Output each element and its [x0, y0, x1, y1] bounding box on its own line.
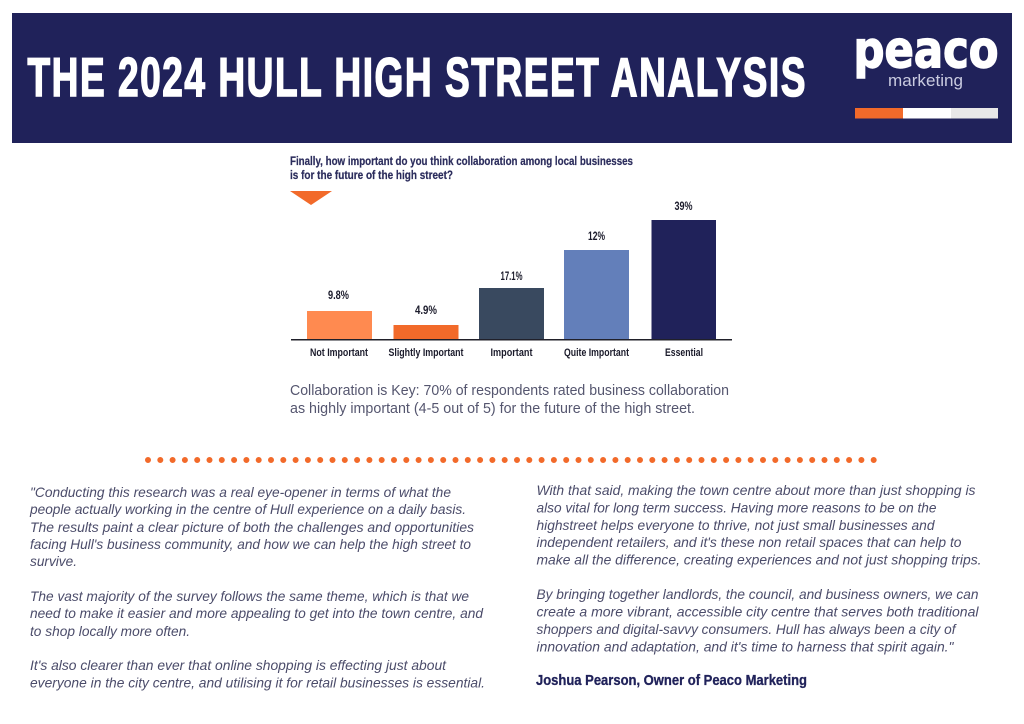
bar chart	[291, 201, 732, 359]
dotted divider	[148, 457, 875, 463]
bar: Not Important: Not Important	[310, 347, 368, 359]
bar: Important	[479, 271, 544, 359]
quote: left column: people actually working in the centre of Hull experience on a daily basis.	[29, 501, 466, 517]
chart question heading	[290, 156, 633, 182]
bar: Essential: Essential	[665, 347, 703, 359]
quote: left column	[29, 484, 485, 690]
bar: Quite Important: Quite Important	[564, 347, 629, 359]
bar: Essential	[652, 201, 716, 359]
quote: left column: to shop locally more often.	[30, 623, 190, 639]
quote: right column: make all the difference, creating experiences and not just shopping trips.	[536, 552, 982, 568]
quote: left column: everyone in the city centre, and utilising it for retail businesses is essential.	[30, 674, 485, 690]
chart question heading: is for the future of the high street?	[290, 170, 453, 182]
quote: right column: With that said, making the town centre about more than just shopping is	[536, 482, 976, 498]
quote: left column: "Conducting this research was a real eye-opener in terms of what the	[30, 484, 451, 500]
quote: right column: innovation and adaptation, and it's time to harness that spirit again."	[536, 638, 955, 654]
chart takeaway text: as highly important (4-5 out of 5) for the future of the high street.	[290, 401, 695, 417]
chart question heading: Finally, how important do you think collaboration among local businesses	[290, 156, 633, 168]
logo: peaco marketing	[854, 22, 998, 118]
quote: right column: also vital for long term success. Having more reasons to be on the	[536, 500, 937, 516]
quote: right column: shoppers and digital-savvy consumers. Hull has always been a city of	[536, 621, 958, 637]
chart takeaway text	[290, 383, 729, 417]
quote: left column: need to make it easier and more appealing to get into the town centre, and	[30, 605, 484, 621]
bar: Slightly Important: 4.9%	[415, 305, 437, 317]
bar: Not Important	[307, 290, 372, 359]
quote: left column: survive.	[30, 553, 77, 569]
bar: Important: Important	[490, 347, 533, 359]
quote: right column: By bringing together landlords, the council, and business owners, we can	[536, 586, 979, 602]
quote attribution: Joshua Pearson, Owner of Peaco Marketing	[536, 672, 807, 689]
logo: peaco marketing: peaco	[854, 22, 998, 80]
quote: left column: It's also clearer than ever that online shopping is effecting just about	[30, 657, 447, 673]
chart takeaway text: Collaboration is Key: 70% of respondents rated business collaboration	[290, 383, 729, 399]
quote: left column: The vast majority of the survey follows the same theme, which is that we	[30, 588, 469, 604]
quote: right column: independent retailers, and it's these non retail spaces that can help to	[536, 534, 962, 550]
bar: Slightly Important: Slightly Important	[388, 347, 464, 359]
logo: peaco marketing: marketing	[888, 71, 963, 90]
bar: Important: 17.1%	[500, 271, 522, 283]
quote: right column: highstreet helps everyone to thrive, not just small businesses and	[536, 517, 936, 533]
quote: left column: The results paint a clear picture of both the challenges and opportunities	[30, 519, 474, 535]
bar: Essential: 39%	[674, 201, 692, 213]
quote: left column: facing Hull's business community, and how we can help the high street to	[30, 536, 471, 552]
bar: Quite Important: 12%	[588, 231, 605, 243]
bar: Slightly Important	[388, 305, 464, 359]
bar: Quite Important	[564, 231, 629, 359]
title: THE 2024 HULL HIGH STREET ANALYSIS	[28, 47, 805, 108]
quote: right column	[536, 482, 982, 654]
icon: orange down triangle	[290, 191, 332, 205]
quote: right column: create a more vibrant, accessible city centre that serves both traditional	[536, 604, 979, 620]
header banner	[12, 13, 1012, 143]
bar: Not Important: 9.8%	[328, 290, 349, 302]
